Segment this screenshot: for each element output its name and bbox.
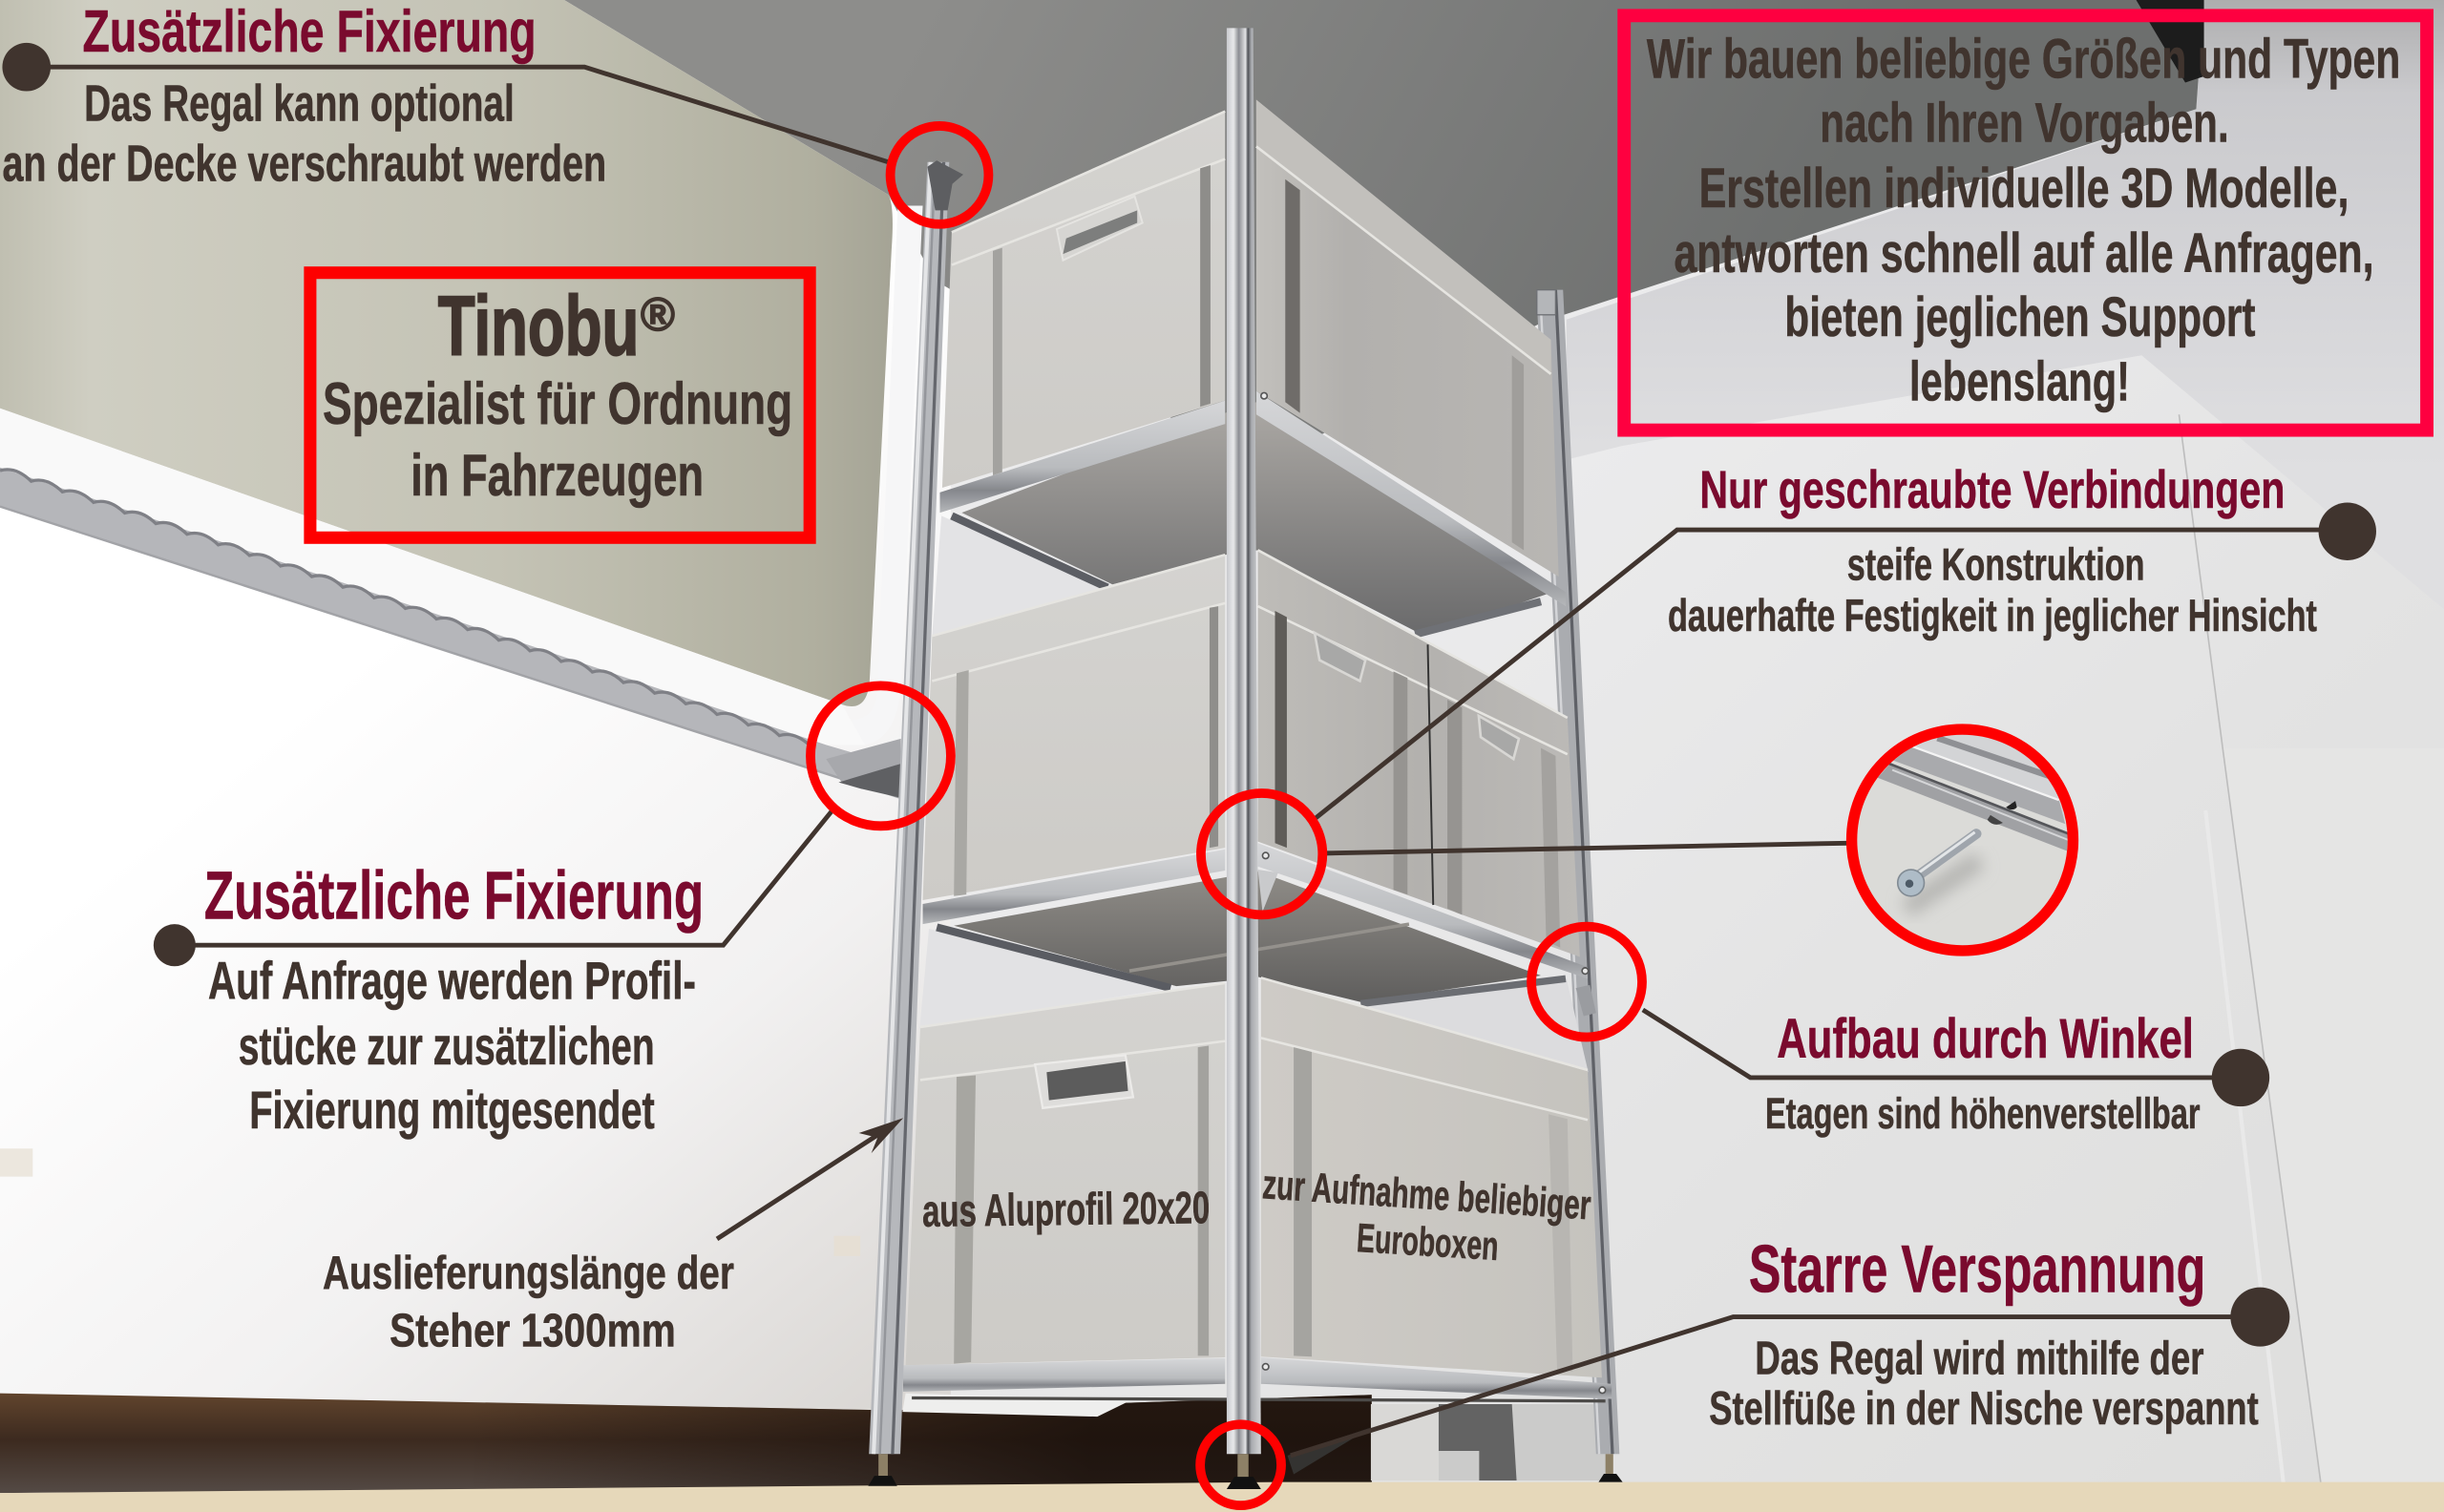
middle box — [923, 550, 1580, 956]
body text: steife Konstruktion — [1847, 539, 2145, 590]
red highlight circles — [811, 126, 1642, 1505]
body text: an der Decke verschraubt werden — [2, 135, 606, 192]
body text: Das Regal wird mithilfe der — [1755, 1334, 2204, 1385]
bolts and brackets — [927, 160, 1606, 1394]
body text — [2, 75, 606, 192]
rear right post — [1536, 290, 1619, 1454]
callout: additional fixation — [154, 810, 832, 1140]
label: aluminium profile: aus Aluprofil 20x20 — [922, 1183, 1211, 1237]
dot — [2, 43, 51, 92]
body text — [1668, 539, 2317, 641]
label: euro boxes: zur Aufnahme beliebiger — [1261, 1162, 1592, 1228]
ring — [1852, 729, 2073, 951]
leader line — [1325, 843, 1847, 853]
shelving unit with euro boxes — [868, 28, 1623, 1489]
callout: screwed connections — [1316, 460, 2376, 818]
arrow — [717, 1118, 903, 1239]
body text — [208, 952, 696, 1140]
text block: lebenslang! — [1909, 351, 2130, 413]
callout: angle brackets — [1643, 1008, 2269, 1138]
bottom box — [906, 977, 1602, 1377]
tagline: in Fahrzeugen — [411, 443, 704, 509]
heading: Aufbau durch Winkel — [1777, 1008, 2194, 1070]
panel: Tinobu — [310, 273, 810, 537]
brand name: Tinobu — [438, 278, 639, 372]
label: euro boxes: Euroboxen — [1356, 1215, 1500, 1269]
dot — [154, 924, 196, 966]
feet — [868, 1454, 1623, 1489]
text: Auslieferungslänge der — [323, 1248, 734, 1299]
bottom frame — [903, 1357, 1612, 1401]
body text: stücke zur zusätzlichen — [239, 1017, 655, 1076]
brand name: ® — [641, 289, 675, 341]
dot — [2230, 1288, 2289, 1347]
body text: Etagen sind höhenverstellbar — [1765, 1089, 2201, 1138]
top box — [942, 99, 1559, 577]
leader line — [50, 67, 889, 162]
body text — [1709, 1334, 2259, 1435]
text block: bieten jeglichen Support — [1784, 286, 2255, 348]
body text: Stellfüße in der Nische verspannt — [1709, 1383, 2259, 1435]
body text: Auf Anfrage werden Profil- — [208, 952, 696, 1011]
panel: custom sizes and support — [1624, 15, 2427, 430]
upper shelf — [932, 391, 1566, 636]
frame — [1624, 15, 2427, 430]
magnified detail: screw — [1325, 724, 2081, 958]
tagline — [323, 371, 792, 509]
text block — [1647, 29, 2400, 413]
callout: delivery length — [323, 1118, 903, 1357]
dot — [2212, 1049, 2269, 1106]
text: Steher 1300mm — [390, 1306, 676, 1357]
red frame — [310, 273, 810, 537]
leader line — [1291, 1317, 2232, 1456]
leader line — [195, 810, 832, 945]
heading: Zusätzliche Fixierung — [83, 0, 537, 65]
dot — [2319, 503, 2376, 560]
heading: Starre Verspannung — [1749, 1230, 2205, 1306]
front post — [1227, 28, 1261, 1454]
text — [323, 1248, 734, 1357]
icon: screw — [1898, 832, 1976, 896]
left post — [869, 162, 949, 1454]
body text: Fixierung mitgesendet — [249, 1081, 655, 1140]
leader line — [1316, 530, 2323, 818]
label: euro boxes — [1261, 1162, 1592, 1269]
body text: Das Regal kann optional — [84, 75, 515, 133]
detail image — [1858, 735, 2068, 945]
lower shelf — [919, 843, 1589, 1072]
callout: ceiling fixation — [2, 0, 889, 192]
text block: nach Ihren Vorgaben. — [1820, 93, 2229, 155]
leader line — [1643, 1010, 2213, 1078]
callout: rigid bracing — [1291, 1230, 2289, 1456]
heading: Zusätzliche Fixierung — [204, 858, 704, 934]
tagline: Spezialist für Ordnung — [323, 371, 792, 437]
